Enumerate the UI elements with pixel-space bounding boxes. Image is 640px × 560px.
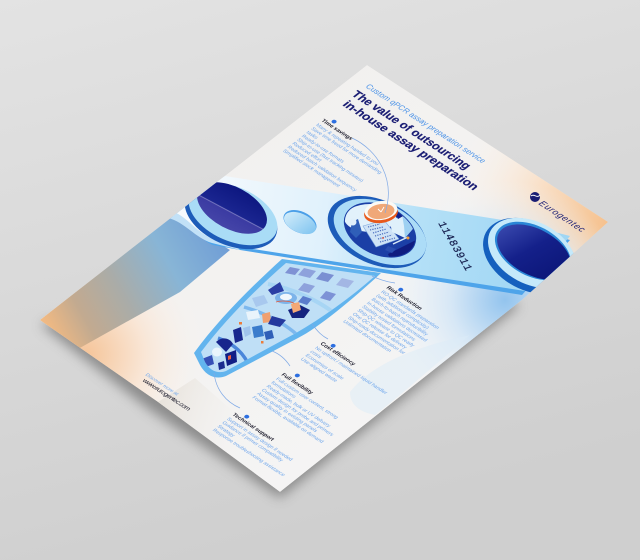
block: time savings: Simplified stock management (281, 149, 342, 189)
block: full flexibility: Custom design for probe and primers (260, 388, 335, 438)
subtitle: Custom qPCR assay preparation service (363, 83, 488, 165)
block: risk reduction: (with additional complexity) (374, 294, 430, 331)
block: risk reduction: In-house validations decreased (365, 301, 429, 343)
website: www.eurogentec.com (140, 377, 192, 413)
fold shading (158, 378, 219, 447)
block: full flexibility: formulations (269, 381, 297, 400)
left blue band (40, 216, 230, 349)
block: cost efficiency: Economies of scale (303, 353, 345, 381)
block: time savings: tasks (304, 130, 320, 141)
tube number: 11483911 (434, 220, 474, 272)
block: technical support: Technical support (230, 413, 275, 442)
block: technical support: Strategy (215, 424, 236, 438)
block: risk reduction (344, 286, 439, 354)
icon: logo mark (530, 192, 540, 202)
block: risk reduction: Risk Reduction (384, 286, 424, 312)
block: time savings: Time savings (319, 119, 354, 141)
block: time savings: Ready-to-use formats (300, 134, 346, 165)
connector lines (214, 138, 395, 408)
icon: calendar (363, 220, 399, 247)
block: risk reduction: Ship-QC release to QC ready (355, 308, 416, 348)
block: technical support: Support in assay design if needed (225, 417, 294, 462)
logo: Eurogentec (536, 199, 588, 234)
block: technical support: Guidance if primer compatibility (220, 421, 285, 463)
block: cost efficiency: costs (308, 350, 323, 360)
block: cost efficiency: No upfront / maintained liquid handler (313, 346, 389, 396)
block: time savings: Save time freed for more demanding (309, 127, 383, 175)
block: time savings: Many & repeating handed to you (314, 123, 380, 167)
website: Discover more at (143, 373, 180, 397)
block: risk reduction: One QC release for delivery (351, 312, 408, 350)
well 2 drop (283, 210, 316, 234)
block: full flexibility: Assay quality in existing panels (255, 392, 319, 434)
block: full flexibility: Ready-made, bulk or UV delivery (264, 384, 332, 429)
block: risk reduction: RO-QC standards preparation (379, 290, 441, 331)
block: technical support (212, 412, 294, 476)
block: full flexibility: Full-custom user content, strong (274, 377, 340, 420)
well 4 (483, 218, 574, 292)
block: cost efficiency: Use-aligned waste (299, 357, 339, 383)
block: time savings: Ship-to-use (fast tracking minutes) (295, 138, 365, 184)
block: time savings (283, 118, 382, 192)
block: risk reduction: Stability tested formulations (360, 305, 417, 342)
title: in-house assay preparation (340, 98, 482, 193)
well 3 with illustration (328, 196, 426, 268)
block: time savings: Reduced batch validation frequency (286, 145, 358, 193)
icon: box (390, 214, 413, 238)
title: The value of outsourcing (349, 88, 474, 172)
block: technical support: Response troubleshooting assistance (211, 428, 286, 478)
well 1 (185, 182, 278, 250)
block: full flexibility (252, 372, 338, 443)
paper shadow (40, 250, 520, 498)
flyer sheet (40, 65, 608, 492)
block: risk reduction: Batch-to-batch reproducibility (369, 297, 430, 337)
block: risk reduction: Ship-ready documentation for (346, 316, 407, 356)
logo (530, 192, 584, 232)
block: time savings: Reduced effort (290, 141, 323, 163)
block: full flexibility: Format-flexible, available on demand (250, 395, 325, 445)
block: cost efficiency: Cost efficiency (318, 342, 357, 367)
test tube strip (168, 176, 570, 295)
tube illustration (194, 259, 381, 378)
block: risk reduction: Unlimited documentation (341, 319, 393, 354)
icon: orange clock (364, 200, 398, 224)
block: full flexibility: Full flexibility (279, 373, 315, 396)
pale blue corner shape (350, 346, 441, 415)
